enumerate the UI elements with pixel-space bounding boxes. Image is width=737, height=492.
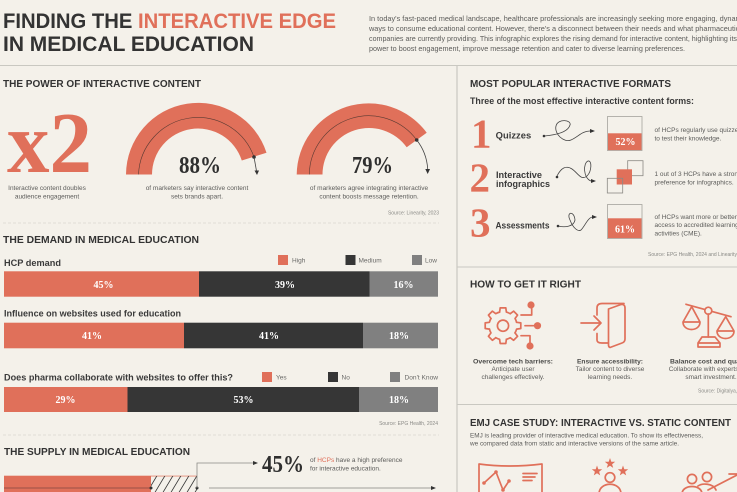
chart: HCP demand: HCP demand (4, 258, 61, 268)
chart: influence on websites: 18% (389, 331, 409, 342)
arrow: to 45% (197, 463, 254, 488)
intro: case study: EMJ is leading provider of interactive medical education. To show its effectiveness, (470, 432, 703, 439)
intro text: ways to consume educational content. However, there's a disconnect between their needs and what pharmaceutical (368, 24, 737, 33)
title (3, 10, 336, 56)
intro: case study (469, 432, 703, 447)
caption: ensure accessibility: Tailor content to diverse (576, 366, 645, 373)
caption: overcome tech barriers (473, 358, 553, 381)
chart: pharma collaboration: Don't Know (404, 374, 438, 382)
chart: pharma collaboration: 29% (56, 395, 76, 406)
gauge: 88%: sets brands apart. (171, 194, 223, 200)
icon: chart on a board (479, 464, 542, 492)
caption: overcome tech barriers: Anticipate user (492, 366, 535, 373)
intro text (368, 14, 737, 53)
intro text: power to boost engagement, improve message retention and cater to diverse learning preferences. (369, 44, 685, 53)
panel: the power of interactive content (3, 78, 439, 216)
icon: gear with nodes (485, 301, 541, 350)
bar: supply (4, 476, 198, 492)
stat: 45%: 45% (262, 452, 304, 478)
source: linearity: Source: Linearity, 2023 (388, 210, 439, 216)
chart: pharma collaboration: Yes (276, 374, 287, 382)
chart: HCP demand: 16% (394, 280, 414, 291)
stat: x2: Interactive content doubles (8, 185, 87, 192)
heading: power of interactive content: THE POWER OF INTERACTIVE CONTENT (3, 78, 202, 90)
chart: HCP demand: 39% (275, 280, 295, 291)
stat: 45%: of HCPs have a high preference (310, 457, 403, 464)
chart: pharma collaboration: 53% (234, 395, 254, 406)
stat: 45% (262, 452, 403, 478)
chart: influence on websites: 41% (82, 331, 102, 342)
chart: influence on websites (4, 308, 438, 348)
icon: person with stars (592, 458, 628, 492)
format 1: quizzes: Quizzes (496, 130, 531, 140)
icon: people with rising arrow (682, 472, 737, 492)
format 3: assessments (470, 200, 737, 246)
format 3: assessments: of HCPs want more or better (654, 214, 737, 221)
intro: case study: we compared data from static and interactive versions of the same article. (469, 440, 679, 447)
chart: HCP demand (4, 255, 438, 297)
panel: most popular interactive formats (470, 78, 737, 258)
chart: pharma collaboration: 18% (389, 395, 409, 406)
format 3: assessments: 3 (470, 200, 490, 246)
format 3: assessments: 61% (615, 224, 635, 236)
format 2: interactive infographics: 2 (470, 155, 490, 201)
stat: x2: x2 (7, 94, 92, 191)
stat: x2: audience engagement (15, 194, 79, 200)
source: EPG health: Source: EPG Health, 2024 (379, 421, 438, 427)
gauge: 79%: 79% (352, 153, 393, 179)
format 1: quizzes: 52% (616, 137, 636, 148)
heading: how to get it right: HOW TO GET IT RIGHT (470, 279, 582, 291)
format 1: quizzes (471, 111, 737, 157)
caption: balance cost and quality (669, 358, 737, 381)
caption: balance cost and quality: smart investment. (685, 374, 737, 381)
panel: how to get it right (470, 279, 737, 395)
chart: HCP demand: 45% (94, 280, 114, 291)
caption: ensure accessibility: learning needs. (588, 374, 632, 381)
panel: the supply in medical education (4, 446, 436, 492)
title: FINDING THE INTERACTIVE EDGE (3, 10, 336, 33)
caption: overcome tech barriers: Overcome tech barriers: (473, 358, 553, 365)
chart: pharma collaboration (4, 372, 438, 412)
gauge: 88% (126, 103, 266, 200)
gauge: 79%: content boosts message retention. (319, 194, 419, 200)
panel: the demand in medical education (3, 234, 438, 427)
gauge: 88%: 88% (179, 153, 221, 179)
caption: overcome tech barriers: challenges effectively. (482, 374, 545, 381)
panel: EMJ case study (469, 417, 737, 492)
chart: HCP demand: Medium (358, 258, 382, 264)
format 2: interactive infographics: infographics (496, 179, 550, 189)
gauge: 79% (297, 103, 430, 200)
caption: ensure accessibility (576, 358, 645, 381)
chart: influence on websites: 41% (259, 331, 279, 342)
format 3: assessments: activities (CME). (654, 230, 702, 238)
format 3: assessments: access to accredited learning (654, 222, 737, 229)
gauge: 79%: of marketers agree integrating interactive (310, 185, 428, 192)
chart: HCP demand: High (292, 258, 306, 264)
chart: pharma collaboration: No (342, 374, 350, 382)
caption: ensure accessibility: Ensure accessibility: (577, 358, 643, 365)
heading: supply: THE SUPPLY IN MEDICAL EDUCATION (4, 446, 190, 458)
gauge: 88%: of marketers say interactive content (146, 185, 248, 192)
subheading: formats: Three of the most effective interactive content forms: (470, 96, 694, 106)
icon: door with arrow (581, 304, 625, 348)
format 2: interactive infographics: preference for infographics. (654, 180, 734, 186)
title: IN MEDICAL EDUCATION (3, 33, 254, 56)
chart: influence on websites: Influence on websites used for education (4, 308, 181, 318)
format 2: interactive infographics (470, 155, 737, 201)
arrow head (253, 461, 258, 465)
format 1: quizzes: 1 (471, 111, 492, 157)
arrow: timeline (209, 486, 436, 490)
icon: balance scale (683, 304, 734, 347)
format 3: assessments: Assessments (496, 221, 550, 231)
stat: 45%: for interactive education. (310, 466, 381, 472)
chart: pharma collaboration: Does pharma collaborate with websites to offer this? (4, 372, 233, 382)
format 2: interactive infographics: Interactive (496, 170, 542, 180)
chart: HCP demand: Low (425, 258, 437, 264)
heading: formats: MOST POPULAR INTERACTIVE FORMATS (470, 78, 671, 90)
format 1: quizzes: to test their knowledge. (654, 136, 722, 142)
heading: demand: THE DEMAND IN MEDICAL EDUCATION (3, 234, 199, 246)
